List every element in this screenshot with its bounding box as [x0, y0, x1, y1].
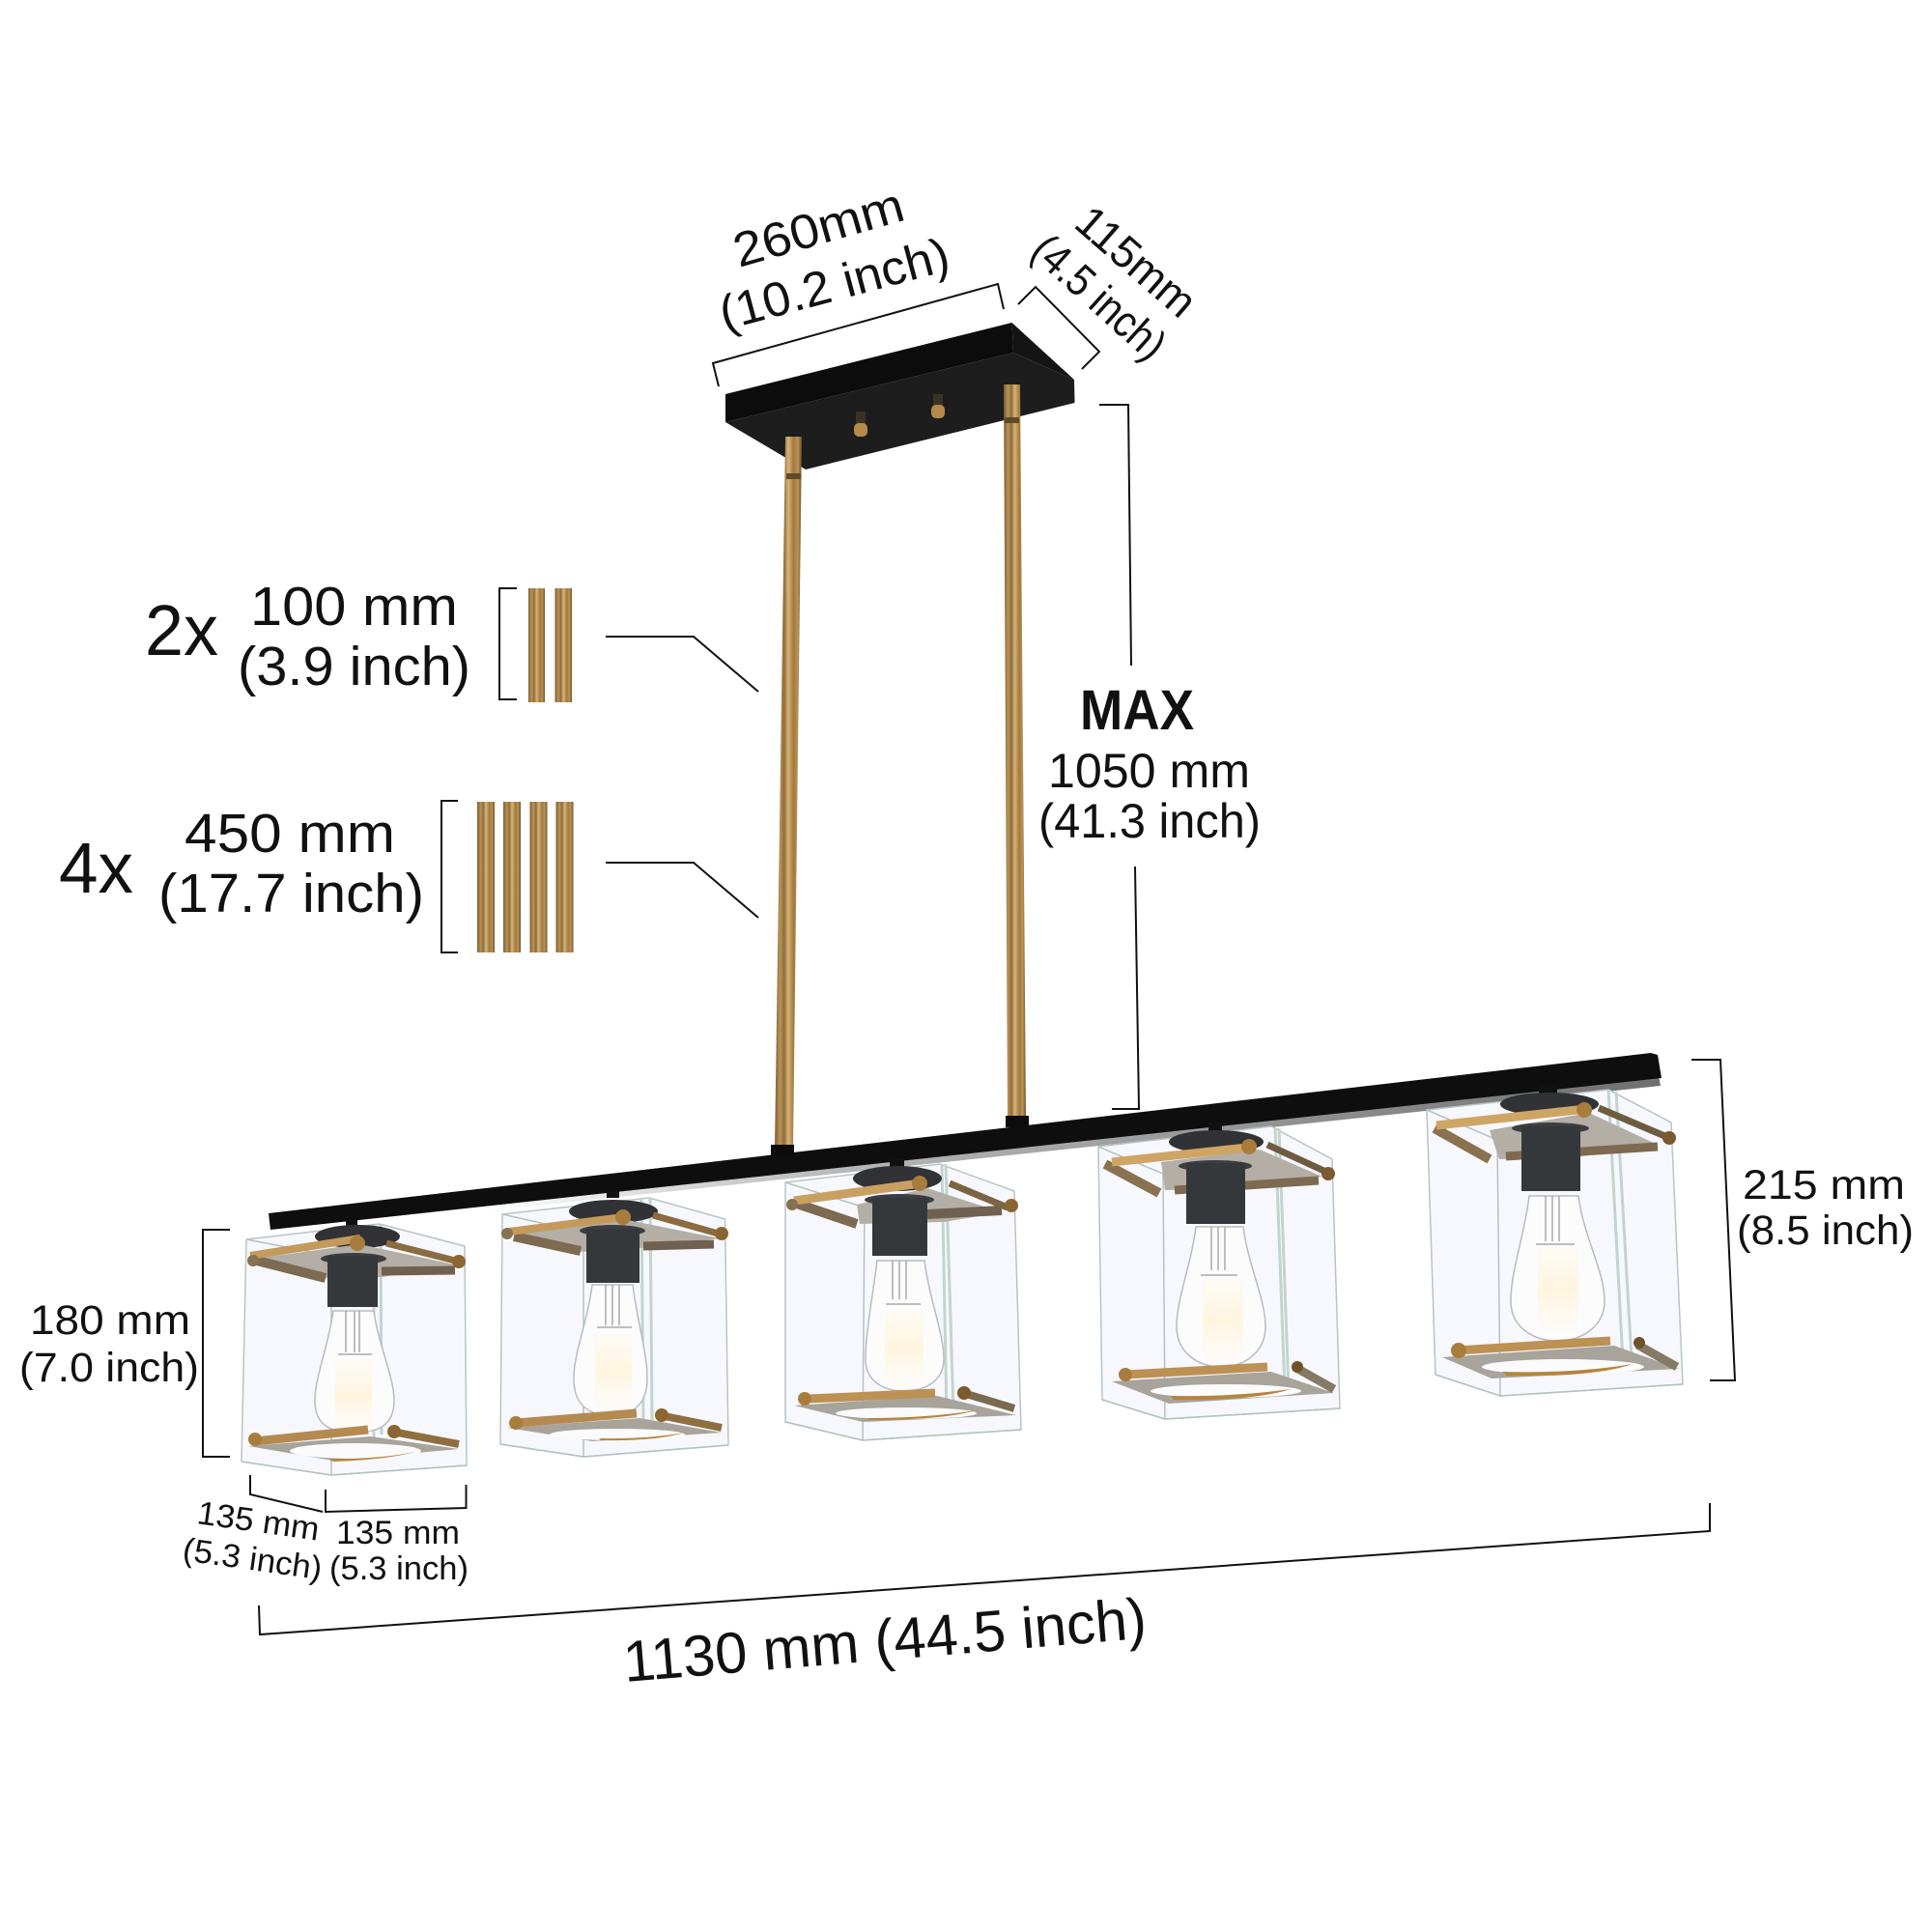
dimension: max drop height: MAX	[1080, 679, 1194, 742]
dimension: total length: 1130 mm (44.5 inch)	[620, 1586, 1149, 1694]
dimension: shade depth	[181, 1475, 325, 1587]
dimension: shade depth: 135 mm	[195, 1494, 322, 1548]
parts: 2x 100 mm rods	[145, 576, 572, 702]
leader line to 100 mm rods	[606, 637, 758, 692]
parts: 4x 450 mm rods: (17.7 inch)	[158, 863, 424, 924]
parts: 4x 450 mm rods	[59, 801, 574, 952]
dimension: total length	[259, 1503, 1710, 1694]
dimension: shade height: 180 mm	[30, 1297, 190, 1344]
lamp 3	[785, 1159, 1021, 1440]
ceiling canopy	[725, 323, 1074, 469]
dimension: shade width: 135 mm	[336, 1515, 460, 1551]
dimension: max drop height: (41.3 inch)	[1038, 794, 1261, 848]
parts: 2x 100 mm rods: 100 mm	[250, 576, 458, 638]
dimension: canopy width: 115mm	[1065, 195, 1207, 327]
right suspension rod	[1004, 384, 1026, 1119]
lamp 4	[1098, 1122, 1340, 1419]
parts: 4x 450 mm rods: 4x	[59, 828, 133, 908]
dimension: shade height	[19, 1230, 230, 1457]
dimension: canopy length: 260mm	[727, 178, 910, 278]
left suspension rod	[775, 437, 802, 1148]
dimension: overall lamp height: 215 mm	[1743, 1162, 1905, 1208]
parts: 4x 450 mm rods: 450 mm	[185, 803, 395, 865]
dimension: overall lamp height: (8.5 inch)	[1737, 1208, 1914, 1254]
leader line to 450 mm rods	[606, 863, 758, 918]
dimension: shade width	[326, 1485, 469, 1587]
dimension: canopy length	[713, 178, 1004, 386]
lamp 5	[1427, 1084, 1683, 1396]
dimension: shade width: (5.3 inch)	[329, 1550, 469, 1587]
dimension: shade height: (7.0 inch)	[19, 1345, 199, 1391]
parts: 2x 100 mm rods: 2x	[145, 590, 218, 670]
dimension: canopy width: (4.5 inch)	[1022, 224, 1177, 370]
dimension: max drop height: 1050 mm	[1048, 744, 1250, 798]
parts: 2x 100 mm rods: (3.9 inch)	[238, 636, 470, 697]
dimension: shade depth: (5.3 inch)	[181, 1531, 325, 1587]
dimension: overall lamp height	[1691, 1060, 1914, 1380]
dimension: canopy length: (10.2 inch)	[713, 227, 955, 341]
dimension: max drop height	[1038, 405, 1261, 1109]
main horizontal bar	[269, 1053, 1662, 1230]
lamp 2	[500, 1190, 728, 1457]
lamp 1	[242, 1220, 467, 1475]
